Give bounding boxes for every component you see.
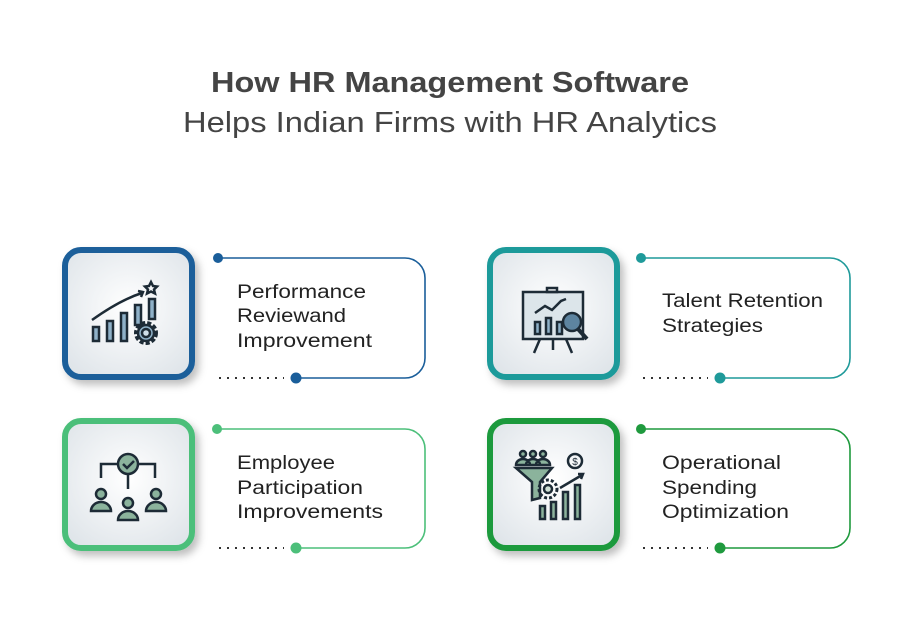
title [183,67,717,139]
icon: funnel gear dollar chart [516,451,583,519]
connector frame [213,253,425,384]
text: Strategies [662,316,763,337]
text: Improvements [237,502,383,523]
text: Talent Retention [662,291,823,312]
icon box [65,250,192,377]
text: Performance [237,282,366,303]
icon: presentation board with magnifier [523,288,587,353]
connector frame [212,424,425,554]
panel: performance review [65,250,425,384]
text: Employee [237,453,335,474]
icon: people with check [91,454,166,520]
icon: funnel gear dollar chart: $ [572,457,578,468]
text: Optimization [662,502,789,523]
text: Participation [237,478,363,499]
icon box [490,250,617,377]
text: Improvement [237,331,373,352]
text: Spending [662,478,757,499]
icon box [490,421,617,548]
text: Reviewand [237,306,346,327]
title: Helps Indian Firms with HR Analytics [183,107,717,139]
text: Operational [662,453,781,474]
connector frame [636,424,850,554]
panel: employee participation [65,421,425,554]
icon: bar chart with gear [92,282,157,343]
icon box [65,421,192,548]
title: How HR Management Software [211,67,689,99]
panel: operational spending [490,421,850,554]
connector frame [636,253,850,384]
panel: talent retention [490,250,850,384]
